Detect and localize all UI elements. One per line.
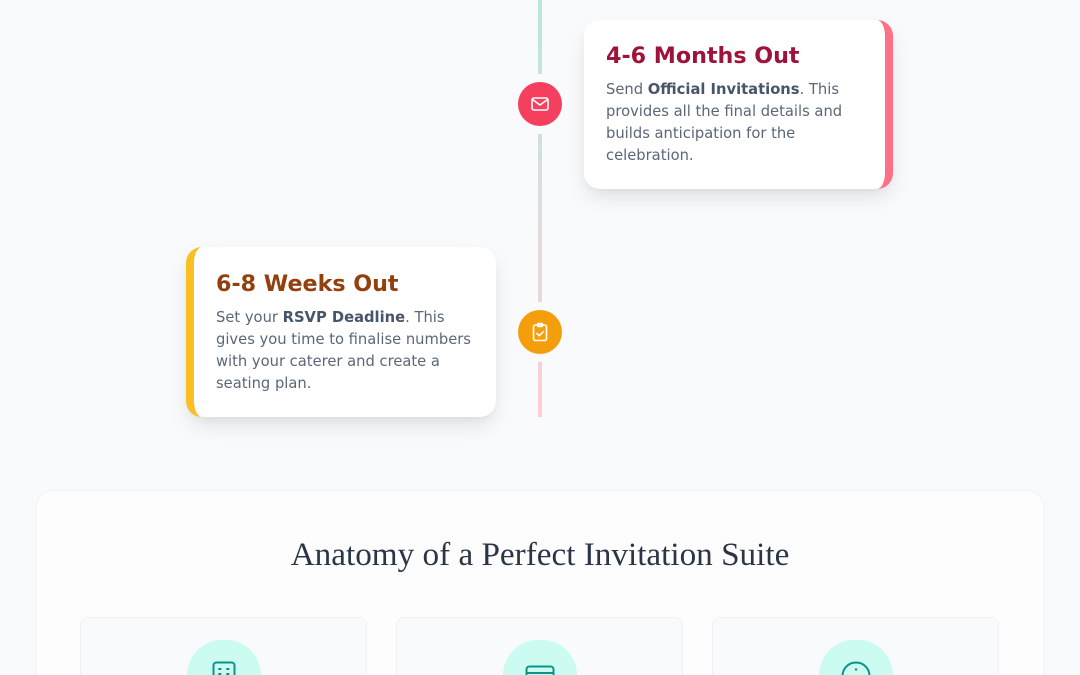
icon: calendar grid — [187, 640, 261, 675]
timeline marker: envelope icon — [518, 82, 562, 126]
sub-card: left — [80, 617, 367, 675]
card text: seating plan. — [216, 375, 311, 392]
card text: with your caterer and create a — [216, 353, 440, 370]
card text: gives you time to finalise numbers — [216, 331, 471, 348]
card text — [606, 81, 842, 164]
card: 4-6 months out — [584, 20, 893, 189]
card text: Set your RSVP Deadline. This — [216, 309, 445, 326]
timeline marker: clipboard icon — [518, 310, 562, 354]
card text: Send Official Invitations. This — [606, 81, 839, 98]
heading: invitation suite: Anatomy of a Perfect Invitation Suite — [291, 536, 789, 573]
card text: builds anticipation for the — [606, 125, 795, 142]
card: 6-8 weeks out — [186, 247, 496, 417]
card heading: 4-6 Months Out — [606, 43, 800, 69]
card text: celebration. — [606, 147, 694, 164]
icon: card — [503, 640, 577, 675]
card text: provides all the final details and — [606, 103, 842, 120]
sub-card: middle — [396, 617, 683, 675]
card text — [216, 309, 471, 392]
card heading: 6-8 Weeks Out — [216, 271, 399, 297]
icon: circle info — [819, 640, 893, 675]
timeline line — [538, 0, 542, 417]
sub-card: right — [712, 617, 999, 675]
panel: invitation suite — [36, 490, 1044, 675]
